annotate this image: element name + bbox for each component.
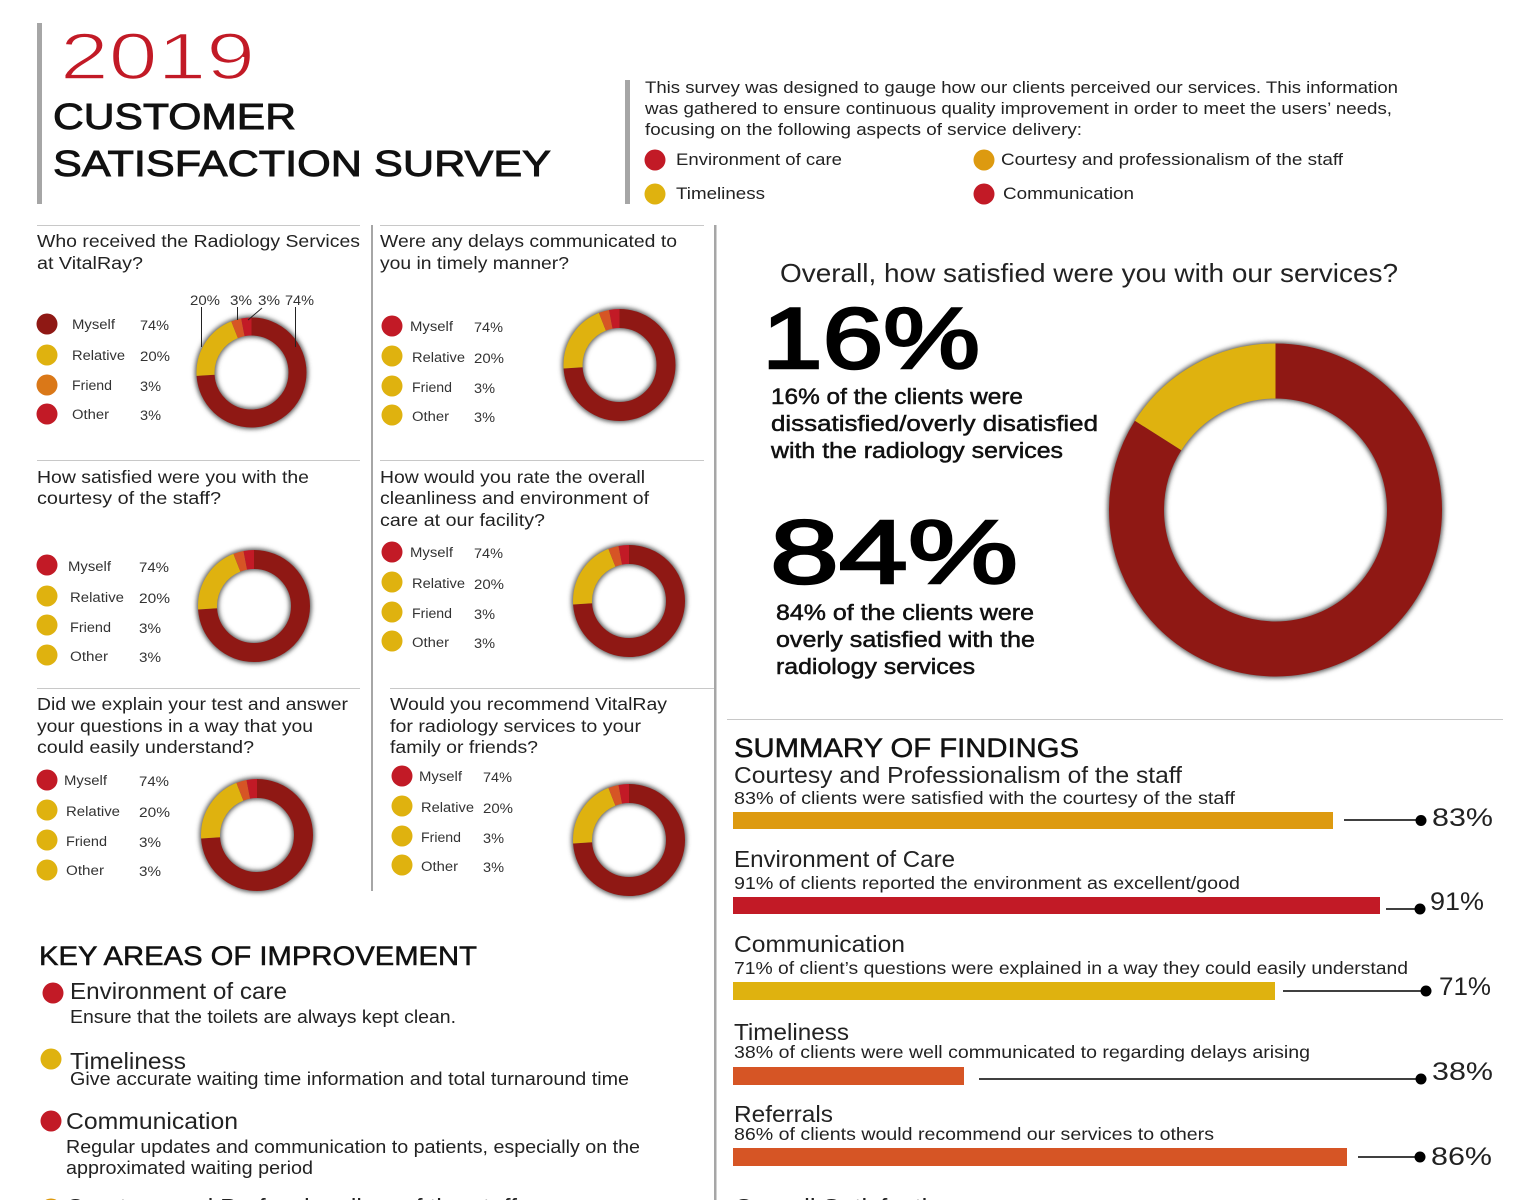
finding: environment bbox=[733, 846, 1484, 916]
legend: 74% bbox=[139, 560, 169, 575]
legend: Relative bbox=[412, 576, 465, 591]
panel: delays communicated bbox=[380, 231, 677, 426]
finding: environment: Environment of Care bbox=[734, 846, 955, 872]
finding: referrals bbox=[733, 1101, 1492, 1171]
large donut chart bbox=[1136, 371, 1414, 649]
legend: Other bbox=[66, 863, 105, 878]
panel: recommend VitalRay: for radiology services to your bbox=[390, 716, 641, 736]
legend: Myself bbox=[419, 769, 462, 784]
legend: 74% bbox=[474, 546, 503, 561]
donut chart bbox=[206, 326, 298, 418]
legend: Friend bbox=[70, 620, 111, 635]
legend: 3% bbox=[140, 408, 161, 423]
legend: 3% bbox=[139, 621, 161, 636]
legend: Relative bbox=[72, 348, 125, 363]
legend: Relative bbox=[421, 800, 474, 815]
panel: who received the services bbox=[36, 231, 360, 424]
legend: Friend bbox=[66, 834, 107, 849]
legend: 20% bbox=[474, 577, 504, 592]
legend: Other bbox=[70, 649, 109, 664]
panel: recommend VitalRay: family or friends? bbox=[390, 737, 538, 757]
legend: Relative bbox=[66, 804, 120, 819]
legend: Relative bbox=[70, 590, 124, 605]
panel: overall satisfaction bbox=[762, 258, 1414, 679]
legend: 20% bbox=[474, 351, 504, 366]
donut chart bbox=[210, 788, 304, 882]
legend: 3% bbox=[139, 864, 161, 879]
panel: key areas of improvement: KEY AREAS OF IMPROVEMENT bbox=[39, 941, 477, 971]
legend: 3% bbox=[139, 650, 161, 665]
panel: key areas of improvement bbox=[39, 941, 640, 1200]
finding: courtesy: Courtesy and Professionalism of the staff bbox=[734, 762, 1183, 788]
legend bbox=[382, 316, 504, 426]
legend: Myself bbox=[72, 317, 115, 332]
donut chart bbox=[573, 318, 666, 412]
panel: delays communicated: Were any delays communicated to bbox=[380, 231, 677, 251]
finding: communication: Communication bbox=[734, 931, 905, 957]
finding: timeliness: 38% bbox=[1432, 1058, 1493, 1086]
title block bbox=[37, 19, 551, 204]
intro text block: This survey was designed to gauge how our clients perceived our services. This information bbox=[645, 78, 1398, 97]
stat: 84 percent: radiology services bbox=[776, 654, 975, 679]
finding: timeliness bbox=[733, 1019, 1493, 1086]
legend: 20% bbox=[139, 805, 170, 820]
legend: 3% bbox=[483, 860, 504, 875]
panel: recommend VitalRay bbox=[390, 694, 676, 886]
item: timeliness: Give accurate waiting time information and total turnaround time bbox=[70, 1069, 629, 1089]
panel: cleanliness and environment: care at our facility? bbox=[380, 510, 545, 530]
finding: environment: 91% bbox=[1430, 888, 1484, 916]
legend: 74% bbox=[474, 320, 503, 335]
item: communication: approximated waiting period bbox=[66, 1158, 313, 1178]
panel: cleanliness and environment: How would you rate the overall bbox=[380, 467, 645, 487]
panel: courtesy of the staff: courtesy of the staff? bbox=[37, 488, 221, 508]
finding: communication: 71% bbox=[1439, 973, 1491, 1001]
finding: communication: 71% of client’s questions were explained in a way they could easily understand bbox=[734, 958, 1408, 978]
callout labels: 20% bbox=[190, 293, 220, 308]
item: communication: Regular updates and communication to patients, especially on the bbox=[66, 1137, 640, 1157]
legend: 3% bbox=[139, 835, 161, 850]
item: environment of care bbox=[42, 978, 456, 1027]
finding: referrals: 86% of clients would recommend our services to others bbox=[734, 1124, 1214, 1144]
panel: overall satisfaction: Overall, how satisfied were you with our services? bbox=[780, 258, 1398, 288]
panel: cleanliness and environment bbox=[380, 467, 676, 652]
donut chart bbox=[582, 794, 676, 886]
donut chart bbox=[208, 560, 300, 652]
legend: Myself bbox=[410, 319, 453, 334]
legend: Other bbox=[421, 859, 459, 874]
stat: 16 percent: 16% of the clients were bbox=[771, 384, 1023, 409]
item: environment of care: Ensure that the toilets are always kept clean. bbox=[70, 1007, 456, 1027]
intro text block: was gathered to ensure continuous quality improvement in order to meet the users’ needs, bbox=[644, 99, 1392, 118]
legend: Friend bbox=[421, 830, 461, 845]
legend: 3% bbox=[474, 607, 495, 622]
stat: 84 percent: overly satisfied with the bbox=[776, 627, 1035, 652]
aspect legend: Communication bbox=[1003, 184, 1134, 203]
stat: 84 percent bbox=[770, 503, 1035, 679]
panel: cleanliness and environment: cleanliness and environment of bbox=[380, 488, 649, 508]
legend: Myself bbox=[410, 545, 453, 560]
stat: 16 percent: dissatisfied/overly disatisfied bbox=[771, 411, 1098, 436]
stat: 84 percent: 84% bbox=[770, 503, 1018, 603]
panel: summary of findings bbox=[733, 733, 1493, 1200]
finding: courtesy bbox=[733, 762, 1493, 832]
legend: 74% bbox=[140, 318, 169, 333]
finding: timeliness: 38% of clients were well communicated to regarding delays arising bbox=[734, 1042, 1310, 1062]
legend: Other bbox=[72, 407, 110, 422]
legend: Myself bbox=[64, 773, 107, 788]
panel: recommend VitalRay: Would you recommend VitalRay bbox=[390, 694, 667, 714]
panel: explained test and questions: Did we explain your test and answer bbox=[37, 694, 348, 714]
callout labels bbox=[190, 293, 314, 347]
panel: explained test and questions: your questions in a way that you bbox=[37, 716, 313, 736]
legend: 20% bbox=[483, 801, 513, 816]
legend bbox=[36, 314, 170, 424]
legend: 74% bbox=[483, 770, 512, 785]
callout labels: 3% bbox=[230, 293, 252, 308]
stat: 16 percent: with the radiology services bbox=[770, 438, 1063, 463]
finding: courtesy: 83% of clients were satisfied with the courtesy of the staff bbox=[734, 788, 1235, 808]
panel: who received the services: Who received the Radiology Services bbox=[37, 231, 360, 251]
legend bbox=[36, 554, 170, 666]
callout labels: 3% bbox=[258, 293, 280, 308]
legend bbox=[392, 766, 513, 876]
legend: 20% bbox=[139, 591, 170, 606]
title block: 2019 bbox=[60, 19, 255, 93]
donut chart bbox=[582, 554, 676, 648]
aspect legend: Environment of care bbox=[676, 150, 842, 169]
legend: Friend bbox=[412, 606, 452, 621]
panel: who received the services: at VitalRay? bbox=[37, 253, 143, 273]
finding: environment: 91% of clients reported the environment as excellent/good bbox=[734, 873, 1240, 893]
finding: referrals: Referrals bbox=[734, 1101, 833, 1127]
panel: delays communicated: you in timely manner? bbox=[380, 253, 569, 273]
legend: Friend bbox=[412, 380, 452, 395]
stat: 16 percent bbox=[762, 291, 1098, 463]
panel: explained test and questions bbox=[36, 694, 348, 882]
item: environment of care: Environment of care bbox=[70, 978, 287, 1004]
legend: 74% bbox=[139, 774, 169, 789]
legend bbox=[36, 770, 170, 880]
finding: referrals: 86% bbox=[1431, 1143, 1492, 1171]
legend: 3% bbox=[474, 636, 495, 651]
callout labels: 74% bbox=[285, 293, 314, 308]
legend: Other bbox=[412, 635, 450, 650]
item: timeliness: Timeliness bbox=[70, 1048, 186, 1074]
legend: Relative bbox=[412, 350, 465, 365]
title block: CUSTOMER bbox=[53, 96, 296, 137]
intro text block: focusing on the following aspects of service delivery: bbox=[645, 120, 1082, 139]
legend: 3% bbox=[483, 831, 504, 846]
legend: 20% bbox=[140, 349, 170, 364]
item: communication bbox=[40, 1108, 640, 1178]
legend: Other bbox=[412, 409, 450, 424]
legend: 3% bbox=[474, 410, 495, 425]
aspect legend bbox=[644, 150, 1343, 204]
panel: summary of findings: SUMMARY OF FINDINGS bbox=[734, 733, 1079, 763]
legend: 3% bbox=[474, 381, 495, 396]
finding: timeliness: Timeliness bbox=[734, 1019, 849, 1045]
panel: courtesy of the staff bbox=[36, 467, 309, 666]
finding: communication bbox=[733, 931, 1491, 1001]
finding: courtesy: 83% bbox=[1432, 804, 1493, 832]
aspect legend: Timeliness bbox=[676, 184, 765, 203]
stat: 16 percent: 16% bbox=[762, 291, 980, 387]
panel: explained test and questions: could easily understand? bbox=[37, 737, 254, 757]
stat: 84 percent: 84% of the clients were bbox=[776, 600, 1034, 625]
legend: 3% bbox=[140, 379, 161, 394]
title block: SATISFACTION SURVEY bbox=[53, 143, 551, 184]
legend: Myself bbox=[68, 559, 111, 574]
intro text block bbox=[625, 78, 1398, 204]
panel: courtesy of the staff: How satisfied were you with the bbox=[37, 467, 309, 487]
legend bbox=[382, 542, 504, 652]
aspect legend: Courtesy and professionalism of the staff bbox=[1001, 150, 1343, 169]
legend: Friend bbox=[72, 378, 112, 393]
item: timeliness bbox=[40, 1048, 629, 1089]
item: communication: Communication bbox=[66, 1108, 238, 1134]
